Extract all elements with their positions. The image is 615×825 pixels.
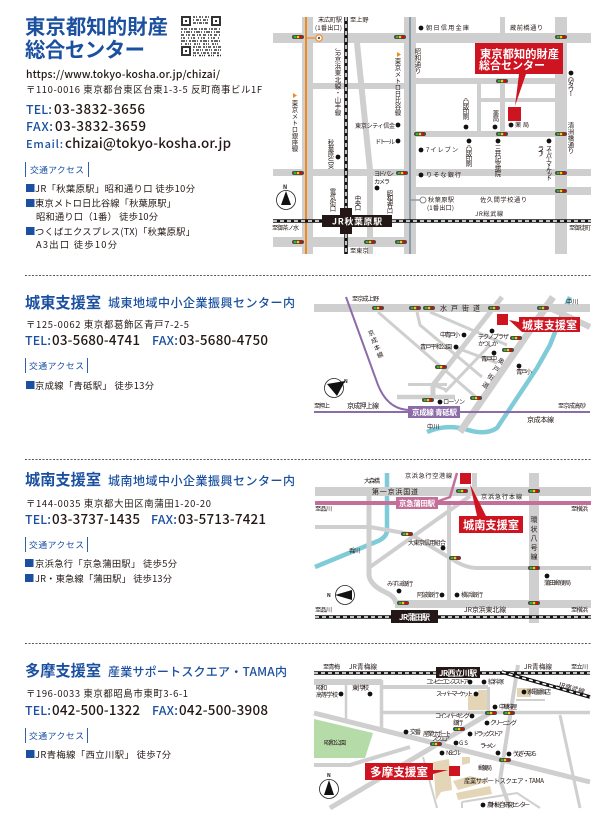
station: JR Kamata [391,610,438,623]
heading: Jonan branch: 城南地域中小企業振興センター内 [108,472,295,489]
panel: Joto branch contact information [25,291,295,392]
map labels: 至品川 [315,504,332,513]
map labels: 至品川 [315,605,332,614]
callout: head office [475,43,563,106]
phone and fax: 042-500-1322 [52,699,140,719]
map labels: 中華料理 [499,702,517,711]
map labels: JR京浜東北線 [464,604,506,614]
panel: Tama branch contact information [25,659,287,761]
marker: head office location [508,107,521,121]
map labels: 末広町駅 [318,15,342,24]
map labels: コインパーキング [435,711,470,720]
map labels: 清洲橋通り [566,121,576,154]
map labels: GS [459,738,468,747]
map labels: 蔵前橋通り [510,23,543,32]
map labels: 京成本線 [527,415,554,425]
map labels: 郵便局 [478,763,492,772]
map labels: ローソン [443,397,465,406]
map labels: 環状八号線 [529,516,539,561]
map labels: 至京成上野 [352,294,379,303]
map labels: スーパーマーケット [544,145,554,181]
buildings [433,688,531,800]
map labels: 凸版印刷 [464,145,474,167]
river [315,473,387,567]
map labels: (1番出口) [427,203,454,212]
map labels: 京浜急行空港線 [405,471,453,480]
map labels: スクエア [432,734,450,743]
JR rail line [315,615,591,619]
phone and fax: TEL: [25,701,51,719]
map labels: カメラ [374,177,390,186]
list: transit directions: JR「秋葉原駅」昭和通り口 徒歩10分 [35,181,196,195]
phone and fax: 03-5680-4741 [52,329,140,349]
phone number: TEL: [26,100,52,118]
map labels: 至京成高砂 [558,401,586,410]
map labels: ライフ [536,145,546,157]
map labels: 電気街口 [328,188,338,212]
map labels: 昭和公園 [324,738,346,747]
website URL: https://www.tokyo-kosha.or.jp/chizai/ [26,66,220,81]
fax number: 03-3832-3659 [55,115,146,135]
map labels: ドラッグストア [473,729,503,738]
callout: Tama branch [365,763,448,780]
map labels: JR青梅線 [524,661,552,671]
map labels: 高等学校 [316,690,338,699]
phone and fax [25,329,268,349]
map labels: 昭和通り [414,48,422,74]
icon: QR code [181,16,221,56]
map labels: 佐久間学校通り [480,195,527,204]
panel: head office contact information [25,10,262,251]
heading: Tama branch: 産業サポートスクエア・TAMA内 [108,663,287,680]
map labels: テクノプラザ [478,332,509,341]
list: transit directions: 京成線「青砥駅」 徒歩13分 [35,378,155,392]
list: transit directions: 昭和通り口（1番） 徒歩10分 [36,209,159,223]
heading: Tama branch [25,659,287,681]
list: transit directions: 京浜急行「京急蒲田駅」 徒歩5分 [35,556,178,570]
map labels [314,294,586,431]
list: transit directions: A3出口 徒歩10分 [36,237,118,251]
icon: compass north [324,378,348,398]
map labels: 銀行 [453,718,463,727]
callout: Tama branch: 多摩支援室 [370,764,428,780]
map labels: 水 戸 街 道 [440,304,480,314]
map labels: ヨドバシ [374,169,394,178]
list: transit directions [25,556,178,585]
map labels: 京成押上線 [347,401,379,411]
map labels: 呑川 [349,546,360,555]
map labels: 至上野 [350,15,369,24]
map labels [316,661,588,809]
heading: Tama branch: 多摩支援室 [25,659,101,681]
map labels: 中青戸小 [440,330,461,339]
Keikyu rail lines [315,501,591,505]
phone and fax: FAX: [152,701,178,719]
map labels: 横浜銀行 [461,590,483,599]
divider [25,458,591,460]
icon: compass north [327,586,354,604]
phone and fax: FAX: [151,510,177,528]
map labels: 三井記念病院 [494,145,502,178]
map labels: 産業サポートスクエア・TAMA [464,776,544,785]
map labels: 至横浜 [571,504,588,513]
phone and fax: FAX: [152,331,178,349]
map labels: CSタワー [566,77,576,97]
map labels: 7イレブン [426,145,458,154]
marker: Tama branch [449,766,460,776]
postal address: 〒110-0016 東京都台東区台東1-3-5 反町商事ビル1F [26,82,262,96]
map labels: 第 一 京 浜 国 道 [372,487,418,497]
callout: Jonan branch [459,484,523,533]
list: transit directions: つくばエクスプレス(TX)「秋葉原駅」 [35,224,195,238]
phone and fax: 042-500-3908 [179,699,268,719]
map labels: 中川 [566,297,578,306]
marker: Jonan branch [460,473,471,484]
river [427,297,570,432]
map labels: 至御茶ノ水 [272,223,300,232]
map labels: 阿波銀行 [417,590,439,599]
map labels: 中川 [427,422,439,431]
map: Aoto Joto branch [314,294,590,432]
map labels: りそな銀行 [426,170,461,179]
station: JR Kamata: JR蒲田駅 [399,612,430,623]
map labels: 青戸中 [481,354,497,363]
map labels: ラーメン [480,741,496,750]
map labels: 奥戸街道 [479,355,507,391]
map labels: 青戸平和公園 [420,342,452,351]
map labels: 東京メトロ銀座線 [290,99,300,153]
heading: Jonan branch [25,468,295,490]
email address: chizai@tokyo-kosha.or.jp [65,132,231,152]
heading: transit access: 交通アクセス [30,163,84,176]
icon: compass north: N [344,378,348,385]
map labels: 京成本線 [366,328,386,361]
title: head office name [25,10,168,63]
map labels: かつしか [478,339,498,348]
map labels: 秋葉原駅 [428,195,454,204]
map labels: JR総武線 [475,209,504,218]
phone and fax: 03-5680-4750 [179,329,268,349]
station: Keikyu Kamata: 京急蒲田駅 [399,498,436,509]
phone and fax: 03-5713-7421 [178,508,266,528]
heading: Joto branch: 城東支援室 [25,291,101,313]
postal address: 〒144-0035 東京都大田区南蒲田1-20-20 [26,496,211,510]
list: transit directions: 東京メトロ日比谷線「秋葉原駅」 [35,196,176,210]
icon: compass north: N [327,772,331,779]
icon: compass north: N [327,592,331,599]
map labels: 朝日信用金庫 [426,23,469,32]
map labels [315,471,588,614]
map labels: 蒲田郵便局 [544,578,571,587]
map labels: 大東京信用組合 [408,538,447,547]
heading: Joto branch: 城東地域中小企業振興センター内 [108,294,295,311]
station: JR Akihabara: JR秋葉原駅 [332,214,382,228]
title: head office name: 総合センター [25,33,145,63]
map labels: 東京シティ信金 [355,121,395,130]
Akihabara rail lines [273,17,591,254]
map labels: クリーニング [490,718,517,727]
map labels: JR京浜東北線・山手線 [334,48,342,117]
heading: transit access: 交通アクセス [29,538,84,551]
map labels: 薬局 [492,109,500,123]
phone and fax: 03-3737-1435 [52,508,140,528]
heading: transit access: 交通アクセス [29,359,84,372]
station: JR Nishi-Tachikawa: JR西立川駅 [439,668,477,679]
map labels: 京浜急行本線 [481,492,523,501]
station: Keisei Aoto: 京成線 青砥駅 [412,407,458,418]
map labels: みずほ銀行 [387,579,413,588]
map labels: ドトール [375,137,395,146]
postal address: 〒125-0062 東京都葛飾区青戸7-2-5 [26,317,189,331]
map labels: 東小学校 [352,683,369,692]
map labels: 東京メトロ日比谷線 [394,57,402,117]
phone and fax [25,508,266,528]
map labels: 青戸小 [516,367,533,376]
map labels: 秋葉原UDX [326,138,336,169]
map labels: 産業サポート [423,729,451,738]
map labels: うなぎ・天ぷら [512,749,537,758]
phone and fax [25,699,268,719]
map labels: 交番 [410,727,421,736]
divider [25,274,591,276]
map labels: 大森橋 [364,476,381,485]
map labels: NSビル [446,748,461,757]
map labels: 至立川 [571,662,588,671]
map labels: 農林総合研究センター [487,800,530,809]
map labels: 中央口 [354,194,362,211]
panel: Jonan branch contact information [25,468,295,585]
callout: Jonan branch: 城南支援室 [463,517,519,533]
park [314,719,373,758]
postal address: 〒196-0033 東京都昭島市東町3-6-1 [26,686,188,700]
map labels: 薬局 [515,120,529,129]
Keisei rail line [314,297,590,412]
map labels: 至押上 [314,401,330,410]
map labels: (1番出口) [315,23,342,32]
map labels [272,15,591,255]
heading: transit access: 交通アクセス [29,729,84,742]
map labels: 昭和 [316,683,327,692]
marker: Joto branch [497,314,508,325]
list: transit directions [26,181,196,251]
callout: head office: 東京都知的財産 [480,46,559,62]
map labels: 至横浜 [571,605,588,614]
map labels: 家電量販店 [527,687,551,696]
map labels: JR南武線 [556,678,587,696]
map labels: 給料塚 [488,677,505,686]
icon: compass north [320,772,338,798]
map: Kamata Jonan branch [315,471,591,623]
map labels: 至東京 [350,246,369,255]
map labels: 昭和通り口 [386,190,394,214]
list: transit directions: JR青梅線「西立川駅」 徒歩7分 [35,747,172,761]
map labels: 至御徒町 [569,223,591,232]
divider [25,642,591,644]
station: JR Akihabara [322,208,392,234]
JR rail lines [314,672,590,697]
icon: compass north [276,183,296,210]
email address: Email: [26,136,63,152]
phone and fax: TEL: [25,510,51,528]
map: Akihabara head office [272,15,591,255]
heading: Jonan branch: 城南支援室 [25,468,101,490]
map labels: コンビニエンスストア [426,677,469,686]
map labels: スーパーマーケット [436,689,473,698]
heading: Joto branch [25,291,295,313]
list: transit directions: JR・東急線「蒲田駅」 徒歩13分 [35,571,173,585]
icon: compass north: N [283,183,287,191]
phone and fax: TEL: [25,331,51,349]
map: Nishi-Tachikawa Tama branch [314,661,590,809]
map labels: JR青梅線 [349,661,377,671]
title: head office name: 東京都知的財産 [25,10,168,40]
map labels: 凸版印刷 [462,98,470,120]
map labels: 至青梅 [323,662,340,671]
phone number: 03-3832-3656 [54,98,145,118]
callout: Joto branch: 城東支援室 [522,317,577,333]
callout: head office: 総合センター [479,57,545,73]
fax number: FAX: [26,117,53,135]
